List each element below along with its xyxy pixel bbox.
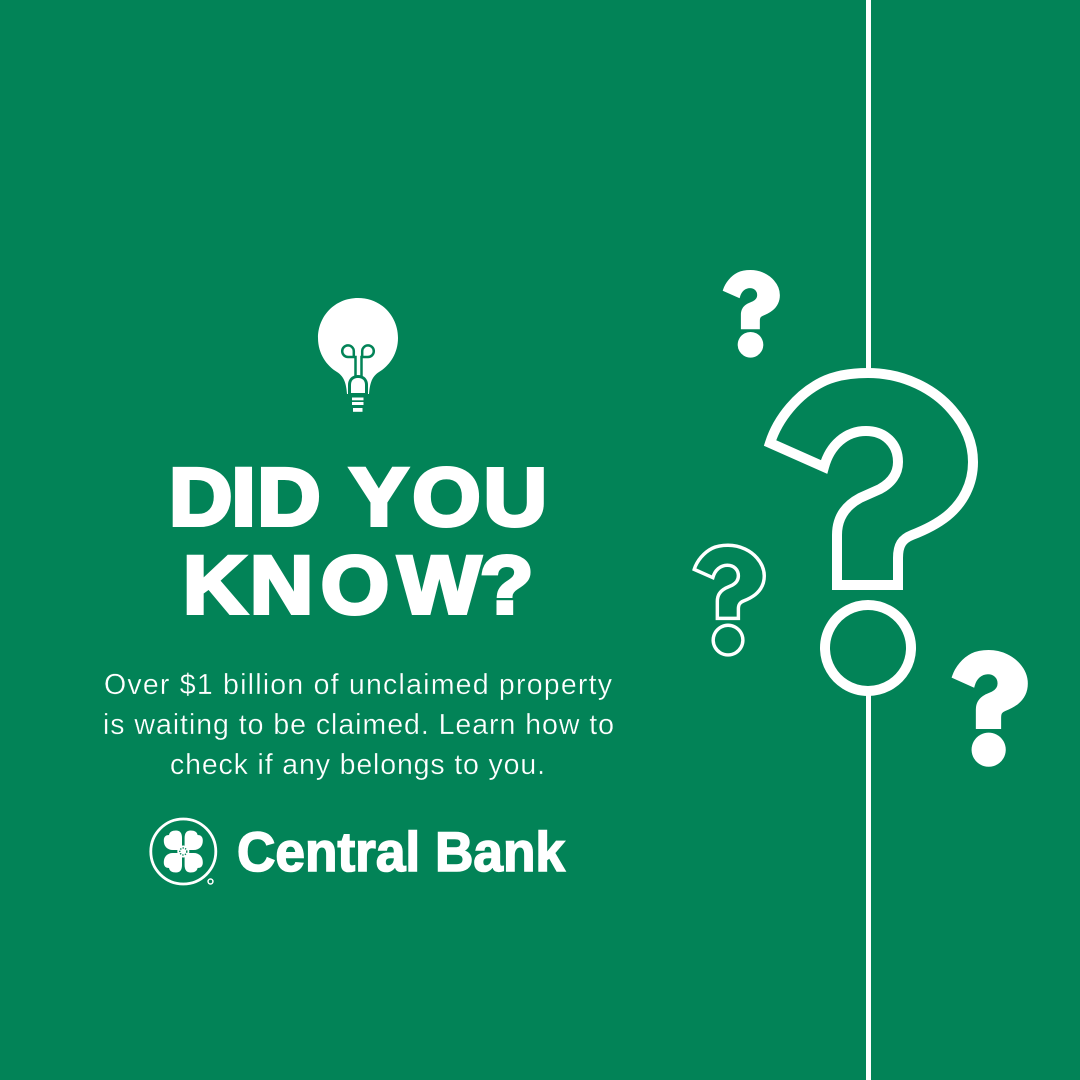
- body text: [103, 669, 614, 781]
- body text: check if any belongs to you.: [170, 749, 545, 781]
- icon: solid question mark bottom right: [954, 652, 1026, 765]
- title: KNOW?: [183, 539, 533, 630]
- title: [169, 451, 547, 630]
- title: DID YOU: [169, 451, 547, 542]
- icon: large outlined question mark: [770, 373, 973, 691]
- icon: solid question mark top: [724, 271, 779, 356]
- logo: Central Bank: [151, 819, 566, 885]
- icon: small outlined question mark: [694, 545, 764, 655]
- vertical line: [866, 0, 871, 1080]
- body text: Over $1 billion of unclaimed property: [104, 669, 613, 701]
- logo emblem: [151, 819, 216, 885]
- icon: light bulb: [318, 298, 398, 412]
- logo wordmark: Central Bank: [237, 820, 566, 883]
- body text: is waiting to be claimed. Learn how to: [103, 709, 614, 741]
